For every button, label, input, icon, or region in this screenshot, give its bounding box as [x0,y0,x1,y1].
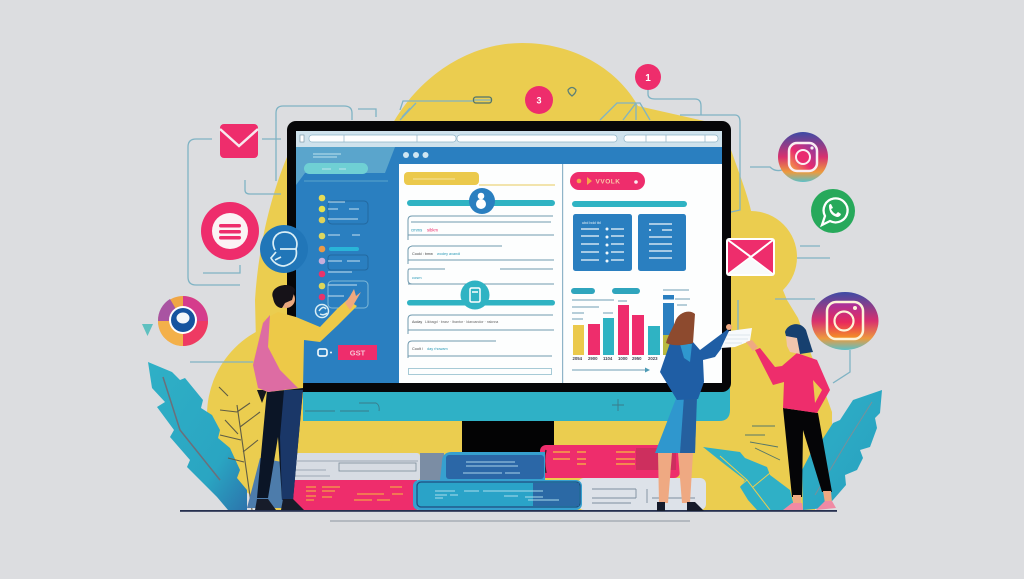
form row three: cosm [412,275,422,280]
panel divider [562,164,563,383]
pink woman shoes [783,501,836,510]
form row one: cmms [411,228,422,232]
icon: teal triangle [142,324,153,336]
form row four: Likbagd · brarz · lbantor · ldaroandor · nsknna [425,320,498,324]
form row five: Coolt / [412,347,424,351]
man shoes [255,499,304,510]
man jacket [253,300,357,392]
right small strokes [745,426,780,460]
right upper leaf [802,390,882,510]
small swirl icon [316,304,328,318]
book: white right [578,478,706,510]
right dashboard panel [570,172,690,372]
blue card right [638,214,686,271]
icon: rainbow profile circle [158,296,208,346]
person: woman in pink top [746,324,836,510]
window control dots [403,152,428,158]
book: pink left [292,480,417,510]
form row five [408,341,552,358]
icon: pink number badge 3: 3 [536,96,542,106]
man bag strap [257,390,267,403]
sidebar header [296,147,395,185]
books stack [292,445,706,510]
form row two: Cooki : bmw [412,252,433,256]
monitor chin [303,388,730,421]
form row two: wodey avandi [437,252,460,256]
left leaf [148,362,247,510]
icon: pink menu circle [201,202,259,260]
book: gray spine [420,453,444,481]
person: woman in blue jacket [655,312,732,511]
book: pink right [540,445,680,478]
pink woman hair [785,324,813,354]
man jacket pink panel [253,315,298,392]
left form panel [404,172,555,374]
sidebar list [319,195,368,308]
monitor frame [287,121,731,392]
blue card left: ubd bdd tbl [582,221,601,225]
chin details [305,399,624,411]
woman skirt [655,396,697,453]
monitor stand [462,418,554,454]
form row one [408,216,554,240]
screen blue layer [296,147,722,383]
bar chart: 1000 [618,356,628,361]
sidebar bottom button [318,345,377,360]
connector lines [188,90,850,383]
teal document badge [460,280,490,310]
blue card left [573,214,632,271]
form row two [408,246,554,284]
bar chart: 2950 [632,356,642,361]
icon: instagram large [812,292,878,350]
icon: whatsapp [811,189,855,233]
icon: pink number badge 3 [525,86,553,114]
right lower leaf [703,447,795,510]
yellow backdrop shape [207,43,832,510]
monitor [287,121,731,454]
person: man in yellow jacket [253,285,361,510]
paper sheet [721,328,752,348]
man hand [345,289,361,310]
pink title pill [570,172,645,190]
ground line [180,510,837,512]
icon: envelope top left [220,124,258,158]
lower ground line [330,520,690,522]
woman shoes [657,502,704,511]
man head [272,285,295,308]
book: blue top [440,452,545,480]
bar chart: 1104 [603,356,613,361]
icon: small pill outline [474,97,492,103]
book: teal bottom [413,480,582,510]
woman hand [726,324,732,330]
icon: blue headset circle [260,225,308,273]
book: gray left [293,453,420,481]
woman legs [658,453,693,503]
teal bar [572,201,687,207]
teal heading bar one [407,200,555,206]
woman jacket highlight [680,344,692,362]
icon: large envelope on yellow circle [726,238,775,276]
bar chart: 2023 [648,356,658,361]
pink woman face [786,336,800,354]
teal heading bar two [407,300,555,306]
browser bar [296,131,722,148]
form row five: day rhowam [427,347,448,351]
man legs [257,388,303,500]
left branch [219,387,260,510]
form row three [408,269,553,284]
icon: small heart outline [568,88,576,96]
pink woman legs skin [793,491,832,505]
form row four [408,315,554,334]
blue badge [469,188,495,214]
pink woman pants [783,408,832,497]
sidebar bottom button: GST [350,348,366,358]
white content panel [399,164,722,383]
form row four: Aoday [412,320,422,324]
icon: pink number badge 1 [635,64,661,90]
woman hair [666,312,695,345]
icon: instagram top [778,132,828,182]
bar chart: 2054 [572,356,583,361]
bar chart [571,288,690,372]
pink woman hand [746,340,758,351]
empty input box [408,368,552,374]
yellow tab [404,172,555,185]
bar chart: 2900 [588,356,598,361]
woman jacket [660,329,730,400]
pink title pill: VVOLK [596,178,620,186]
pink woman top [755,348,830,413]
pink woman arm gap [813,380,822,403]
shards between the man's legs [247,458,286,508]
icon: pink number badge 1: 1 [645,73,651,84]
form row one: sibkm [427,228,438,232]
